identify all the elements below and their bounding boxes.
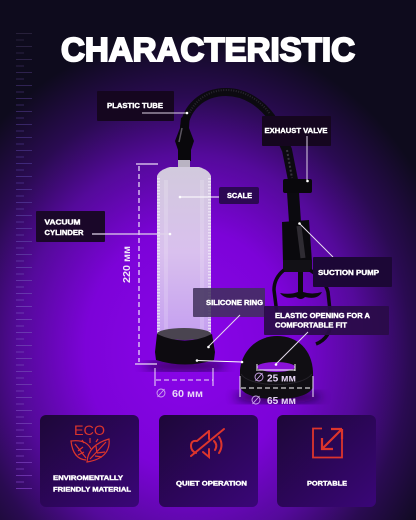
label: elastic opening: COMFORTABLE FIT: [275, 322, 348, 330]
label: vacuum cylinder: [36, 211, 171, 242]
label: scale: [179, 187, 259, 204]
panel: eco material: FRIENDLY MATERIAL: [53, 486, 131, 494]
icon: muted speaker: [191, 429, 224, 457]
icon: expand arrow box: [313, 428, 342, 458]
pump frame: [274, 270, 284, 322]
pump body: [282, 220, 312, 262]
panel: quiet operation: QUIET OPERATION: [176, 480, 247, 488]
valve: [283, 179, 312, 193]
dimension: 65 mm: [240, 376, 313, 407]
label: suction pump: [298, 222, 392, 287]
dimension: 60 mm: [155, 368, 213, 400]
label: vacuum cylinder: VACUUM: [44, 220, 81, 226]
elastic ring: [240, 336, 313, 399]
pump handle: [280, 272, 322, 299]
title: CHARACTERISTIC: [61, 32, 355, 69]
connector: [175, 112, 194, 161]
label: scale: SCALE: [227, 193, 252, 200]
panel: eco material: ENVIROMENTALLY: [53, 475, 124, 482]
silicone base: [155, 334, 215, 364]
panel: portable: PORTABLE: [307, 480, 348, 488]
label: plastic tube: [97, 91, 188, 121]
label: exhaust valve: [262, 116, 331, 182]
label: exhaust valve: EXHAUST VALVE: [264, 128, 328, 135]
hose: [184, 92, 272, 128]
cylinder glass: [178, 160, 190, 168]
label: suction pump: SUCTION PUMP: [318, 270, 379, 277]
label: plastic tube: PLASTIC TUBE: [107, 103, 163, 110]
cylinder inner dark bottom: [157, 328, 211, 340]
dimension: 220 mm: 220 мм: [121, 246, 133, 283]
dimension: 65 mm: 65 мм: [267, 395, 296, 407]
label: vacuum cylinder: CYLINDER: [44, 230, 84, 237]
dimension: 220 mm: [121, 164, 158, 364]
panel: portable: [277, 415, 376, 507]
dimension: 25 mm: 25 мм: [267, 372, 296, 384]
label: elastic opening: ELASTIC OPENING FOR A: [275, 313, 370, 320]
dimension: 25 mm: [255, 364, 296, 384]
product: pump illustration: [143, 90, 331, 403]
label: elastic opening: [264, 306, 389, 366]
panel: eco material: [40, 415, 139, 507]
ruler scale decoration: [16, 34, 32, 488]
dimension: 60 mm: 60 мм: [172, 388, 203, 400]
icon: eco leaves: ECO: [74, 422, 105, 438]
panel: quiet operation: [159, 415, 258, 507]
label: silicone ring: SILICONE RING: [206, 300, 264, 307]
label: silicone ring: [193, 288, 265, 363]
